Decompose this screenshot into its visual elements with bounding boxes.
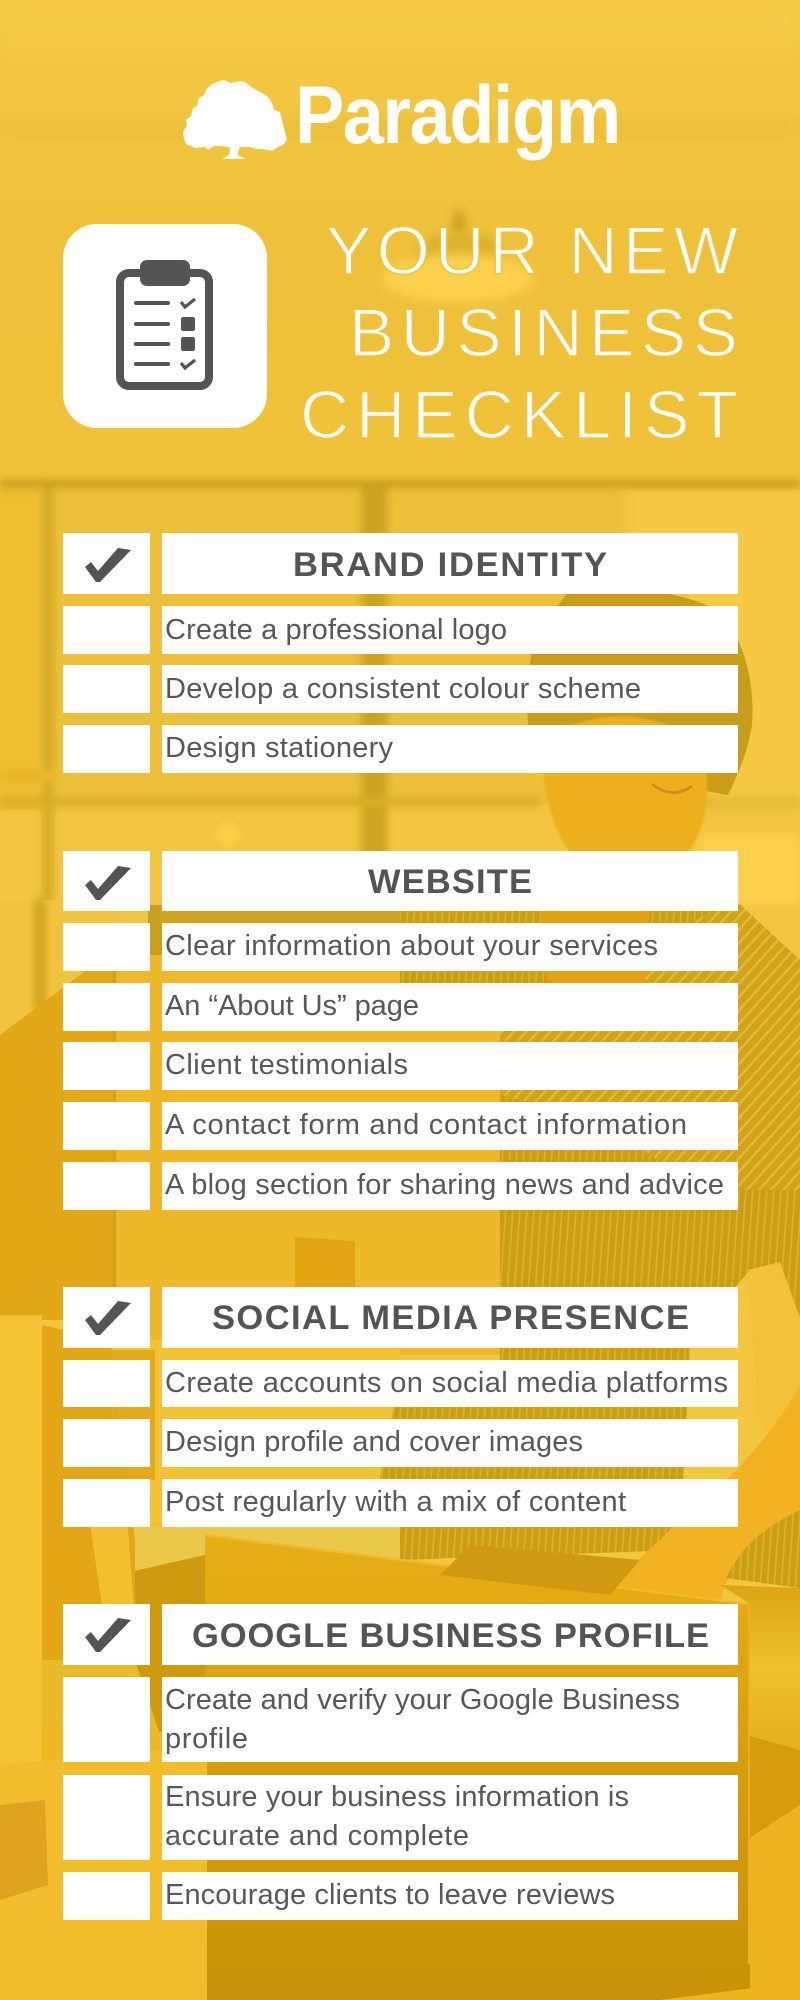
arm (610, 1385, 800, 1600)
open carton front (205, 1535, 750, 1765)
heading: social media presence (162, 1287, 738, 1348)
checklist row (63, 923, 738, 971)
checklist row: accurate and complete (165, 1820, 469, 1852)
heading: social media presence: SOCIAL MEDIA PRESENCE (212, 1299, 689, 1337)
checkbox: social media ticked (63, 1287, 150, 1348)
hair (527, 589, 753, 795)
checklist row (63, 1042, 738, 1090)
checklist row (63, 1677, 738, 1762)
checklist row (63, 1162, 738, 1210)
logo: Paradigm (183, 68, 620, 161)
panel: website (63, 851, 738, 1210)
checklist row: Develop a consistent colour scheme (165, 673, 641, 705)
panel: google business profile (63, 1604, 738, 1920)
heading: brand identity (162, 533, 738, 594)
heading: website (162, 851, 738, 911)
title: YOUR NEW (326, 213, 738, 289)
checklist row (63, 606, 738, 654)
heading: website: WEBSITE (368, 863, 532, 901)
checklist row (63, 1419, 738, 1467)
checklist row: Design stationery (165, 732, 394, 764)
left lower box (0, 1745, 207, 2000)
checklist row: Create accounts on social media platforms (165, 1367, 728, 1399)
checklist row (63, 1872, 738, 1920)
checklist row: A blog section for sharing news and advice (165, 1169, 724, 1201)
checklist row: Clear information about your services (165, 930, 658, 962)
checklist row (63, 1479, 738, 1527)
heading: google business profile: GOOGLE BUSINESS PROFILE (192, 1617, 709, 1655)
panel: brand identity (63, 533, 738, 773)
icon: tree (183, 80, 287, 159)
left carton stack (100, 1527, 400, 1587)
checkbox: google business ticked (63, 1604, 150, 1665)
checklist row (63, 1360, 738, 1407)
wordmark: Paradigm (295, 68, 620, 161)
shirt (370, 865, 800, 1560)
checkbox: brand identity ticked (63, 533, 150, 594)
checklist row: Post regularly with a mix of content (165, 1486, 626, 1518)
checklist row (63, 1775, 738, 1860)
yellow sleeve (748, 1262, 800, 1435)
lower wall and left box (0, 900, 120, 1040)
checklist row: An “About Us” page (165, 990, 419, 1022)
checkbox: website ticked (63, 851, 150, 911)
heading: brand identity: BRAND IDENTITY (293, 546, 607, 584)
checklist row (63, 665, 738, 713)
heading: google business profile (162, 1604, 738, 1665)
checklist row: Encourage clients to leave reviews (165, 1879, 615, 1911)
checklist row (63, 725, 738, 773)
icon: clipboard (120, 260, 209, 386)
panel: social media presence (63, 1287, 738, 1527)
face (543, 717, 707, 882)
checklist row (63, 1102, 738, 1150)
checklist row: Client testimonials (165, 1049, 408, 1081)
checklist row: A contact form and contact information (165, 1109, 687, 1141)
checklist row (63, 983, 738, 1031)
checklist row: Design profile and cover images (165, 1426, 583, 1458)
checklist row: Ensure your business information is (165, 1781, 629, 1813)
checklist row: Create and verify your Google Business (165, 1684, 680, 1716)
panel: clipboard icon tile (63, 224, 267, 428)
title: CHECKLIST (300, 377, 738, 453)
title: BUSINESS (349, 295, 738, 371)
checklist row: profile (165, 1723, 248, 1755)
title (300, 213, 738, 453)
checklist row: Create a professional logo (165, 614, 507, 646)
